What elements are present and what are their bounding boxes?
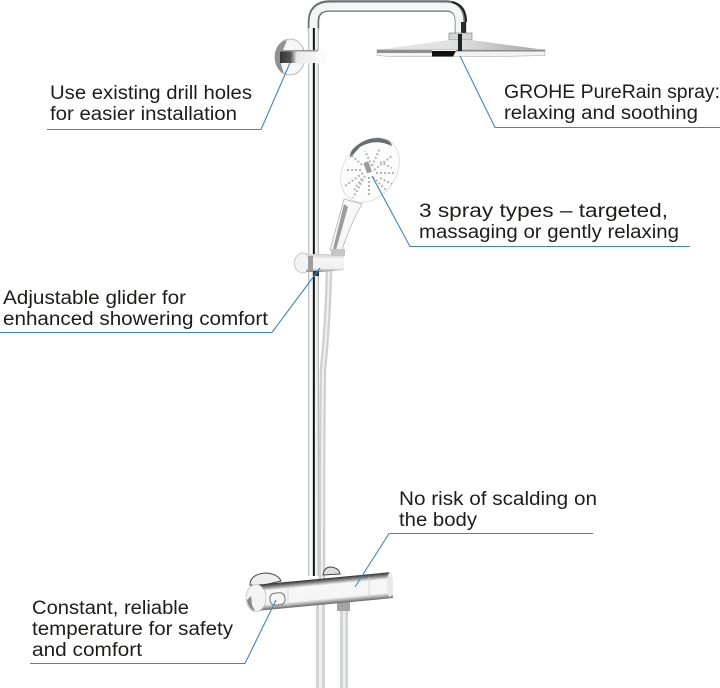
- callout: spray types: massaging or gently relaxing: [419, 222, 679, 243]
- wall bracket: [275, 39, 326, 75]
- callout: scalding: the body: [399, 510, 478, 531]
- hand shower: [329, 126, 411, 256]
- callout: temperature: and comfort: [32, 640, 143, 661]
- callout: glider: [0, 268, 320, 332]
- overhead shower head: [377, 33, 545, 56]
- glider: [294, 253, 344, 276]
- thermostat valve: [246, 567, 393, 612]
- callout: PureRain: relaxing and soothing: [504, 103, 698, 124]
- callout: drill holes: Use existing drill holes: [50, 83, 252, 104]
- callout: temperature: temperature for safety: [32, 619, 234, 640]
- callout: temperature: Constant, reliable: [32, 598, 189, 619]
- callout: drill holes: [47, 63, 290, 130]
- callout: scalding: [355, 489, 597, 587]
- thermostat lower pipe and hose: [316, 590, 350, 688]
- shower column and overhead arm: [308, 2, 466, 576]
- callout: spray types: [372, 176, 690, 246]
- callout: PureRain: [460, 56, 720, 128]
- callout: glider: enhanced showering comfort: [3, 309, 269, 330]
- spray nozzles: [345, 148, 396, 198]
- callout: temperature: [30, 598, 276, 664]
- callout: PureRain: GROHE PureRain spray:: [504, 82, 720, 103]
- callout: glider: Adjustable glider for: [3, 288, 187, 309]
- callout: spray types: 3 spray types – targeted,: [419, 201, 668, 222]
- hand shower hose: [322, 270, 329, 600]
- callout: scalding: No risk of scalding on: [399, 489, 597, 510]
- callout: drill holes: for easier installation: [50, 104, 237, 125]
